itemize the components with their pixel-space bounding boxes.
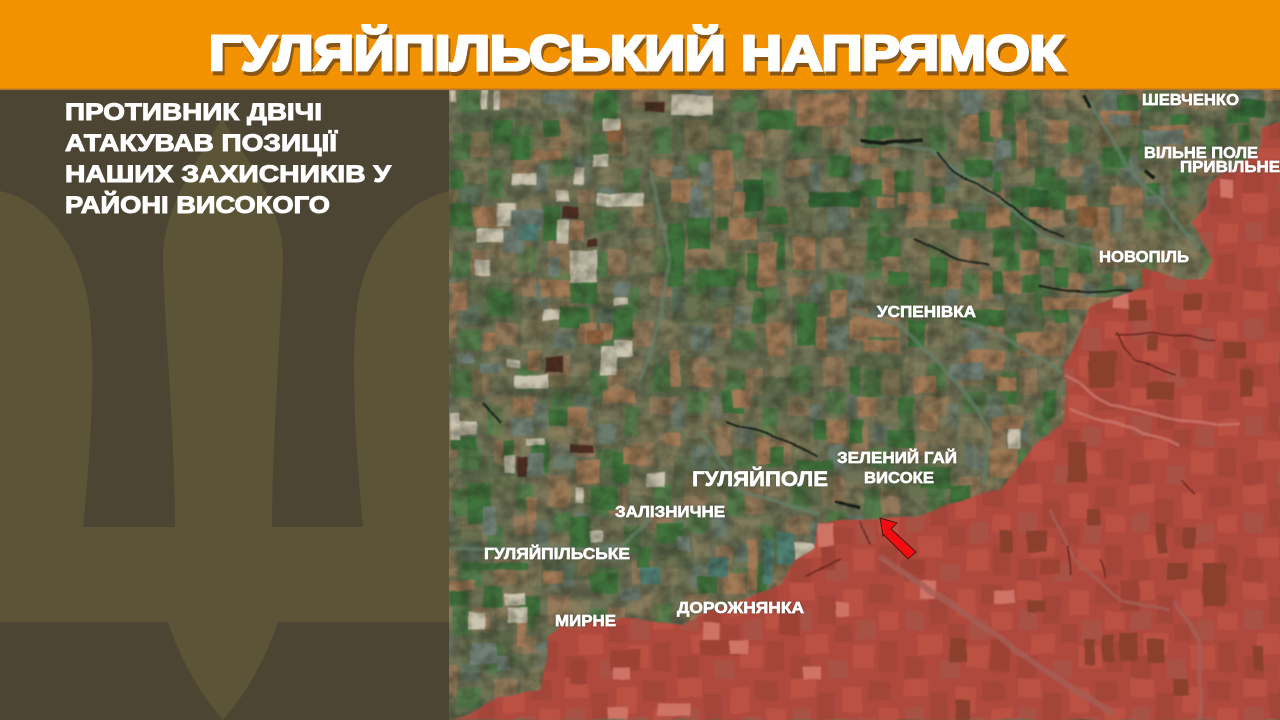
- place label: Шевченко: ШЕВЧЕНКО: [1142, 92, 1239, 109]
- farmland fields: [450, 90, 1265, 670]
- header band: [0, 0, 1280, 90]
- side text: enemy attacks summary: РАЙОНІ ВИСОКОГО: [65, 191, 330, 219]
- ridge lines: [880, 375, 1240, 720]
- occupied territory overlay: [440, 80, 1280, 720]
- place label: Залізничне: ЗАЛІЗНИЧНЕ: [615, 504, 725, 521]
- satellite map: [440, 80, 1280, 720]
- place label: Зелений Гай: ЗЕЛЕНИЙ ГАЙ: [837, 448, 957, 467]
- side text: enemy attacks summary: АТАКУВАВ ПОЗИЦІЇ: [65, 130, 338, 157]
- place label: Дорожнянка: ДОРОЖНЯНКА: [677, 600, 804, 617]
- place label: Гуляйполе: ГУЛЯЙПОЛЕ: [692, 467, 828, 491]
- photographic mottling: [440, 80, 1280, 720]
- side text: enemy attacks summary: [65, 99, 392, 219]
- place label: Гуляйпільське: ГУЛЯЙПІЛЬСЬКЕ: [484, 544, 630, 563]
- place label: Привільне: ПРИВІЛЬНЕ: [1180, 159, 1280, 176]
- left panel: [0, 90, 449, 720]
- red arrow toward Vysoke: [880, 518, 916, 559]
- place label: Новопіль: НОВОПІЛЬ: [1099, 249, 1189, 266]
- place label: Високе: ВИСОКЕ: [864, 470, 934, 487]
- dark creeks: [483, 95, 1155, 508]
- place label: Вільне Поле: ВІЛЬНЕ ПОЛЕ: [1144, 145, 1258, 162]
- place label: Мирне: МИРНЕ: [555, 613, 616, 630]
- trident emblem: [0, 118, 449, 720]
- side text: enemy attacks summary: НАШИХ ЗАХИСНИКІВ У: [65, 161, 392, 188]
- river valleys: [450, 100, 1200, 550]
- title: ГУЛЯЙПІЛЬСЬКИЙ НАПРЯМОК: [209, 26, 1064, 81]
- side text: enemy attacks summary: ПРОТИВНИК ДВІЧІ: [65, 99, 322, 126]
- place label: Успенівка: УСПЕНІВКА: [877, 304, 976, 321]
